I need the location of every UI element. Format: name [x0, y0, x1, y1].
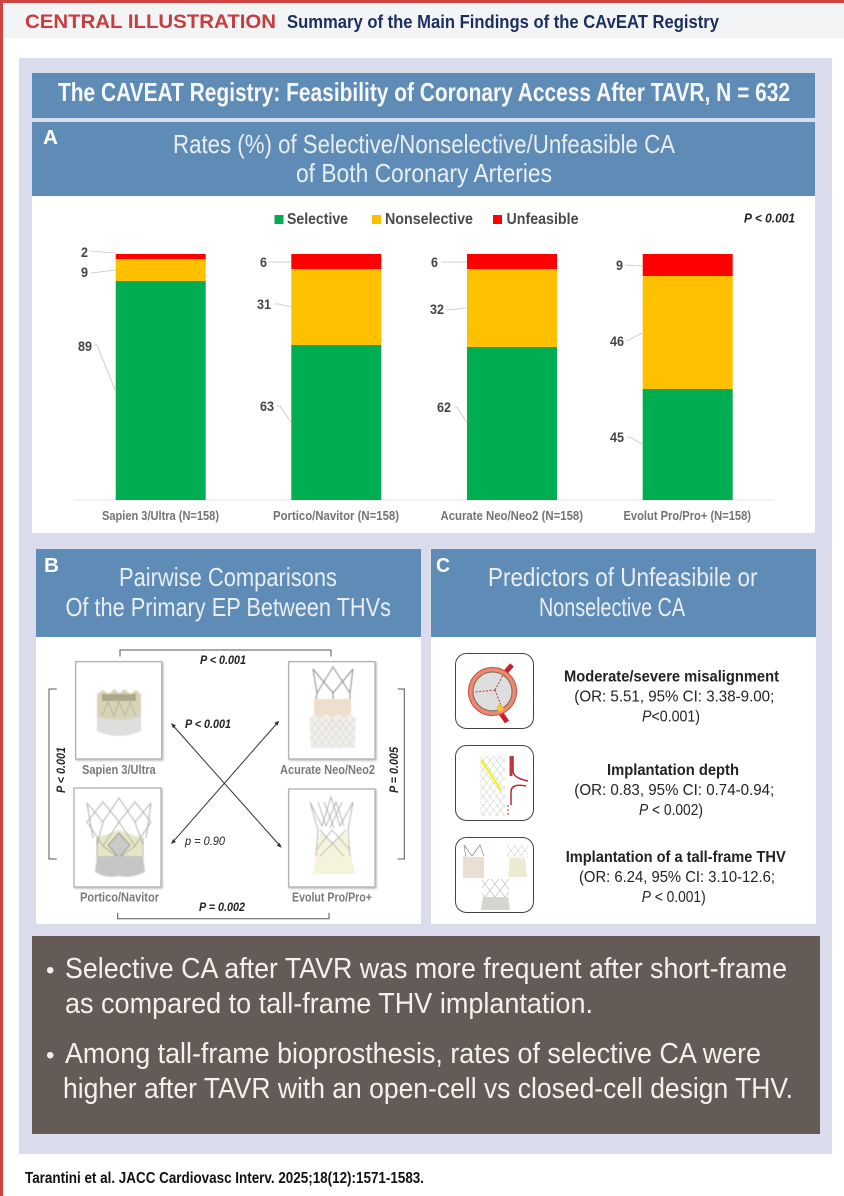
bar: Acurate Neo/Neo2: 32 [430, 301, 444, 317]
panel A header: Rates (%) of Selective/Nonselective/Unfeasible CA [173, 129, 676, 159]
bar: Sapien 3/Ultra: 2 [81, 244, 88, 260]
conclusions box: Selective CA after TAVR was more frequent after short-frame [65, 953, 787, 985]
bar: Portico/Navitor: 31 [257, 296, 271, 312]
p values: p = 0.90 [184, 834, 225, 848]
citation: Tarantini et al. JACC Cardiovasc Interv. 2025;18(12):1571-1583. [25, 1170, 424, 1187]
panel B: pairwise comparisons [36, 549, 421, 924]
p values: P = 0.002 [199, 900, 245, 914]
text: moderate/severe misalignment [564, 669, 779, 726]
device: Portico/Navitor: Portico/Navitor [80, 891, 159, 905]
panel A header: of Both Coronary Arteries [296, 158, 552, 188]
device: Acurate Neo/Neo2: Acurate Neo/Neo2 [280, 763, 375, 777]
panel A: stacked bar chart [32, 122, 815, 533]
bar: Acurate Neo/Neo2: Acurate Neo/Neo2 (N=158) [440, 509, 583, 523]
device: Sapien 3/Ultra: Sapien 3/Ultra [82, 763, 157, 777]
legend [274, 211, 579, 228]
bar: Evolut Pro/Pro+: 45 [610, 429, 624, 445]
conclusions box: higher after TAVR with an open-cell vs closed-cell design THV. [63, 1073, 793, 1105]
p values [54, 653, 401, 914]
device: Portico/Navitor [74, 788, 161, 905]
legend: Unfeasible [506, 211, 579, 228]
panel B header: Pairwise Comparisons [119, 562, 337, 592]
text: tall-frame THV: (OR: 6.24, 95% CI: 3.10-12.6; [579, 869, 775, 886]
bar: Sapien 3/Ultra: 89 [78, 338, 92, 354]
panel B header: B [44, 555, 59, 577]
bar: Acurate Neo/Neo2 [430, 254, 583, 523]
bar: Portico/Navitor: 6 [260, 254, 267, 270]
text: moderate/severe misalignment: Moderate/severe misalignment [564, 669, 779, 686]
panel C header: Nonselective CA [539, 592, 685, 622]
panel A header [32, 122, 815, 196]
header band: CENTRAL ILLUSTRATION [25, 12, 276, 33]
conclusions box [32, 936, 820, 1134]
header band: Summary of the Main Findings of the CAvEAT Registry [287, 12, 719, 32]
bar: Sapien 3/Ultra [78, 244, 219, 523]
device: Evolut Pro/Pro+ [289, 789, 375, 905]
text: tall-frame THV: Implantation of a tall-frame THV [566, 849, 786, 866]
comparison brackets [49, 650, 404, 919]
bar: Portico/Navitor [257, 254, 399, 523]
icon: tall-frame THVs [456, 838, 534, 912]
p values: P = 0.005 [387, 747, 401, 793]
bar: Evolut Pro/Pro+: Evolut Pro/Pro+ (N=158) [624, 509, 751, 523]
legend: Nonselective [385, 211, 473, 228]
bar: Portico/Navitor: 63 [260, 398, 274, 414]
bar: Portico/Navitor: Portico/Navitor (N=158) [273, 509, 399, 523]
device: Evolut Pro/Pro+: Evolut Pro/Pro+ [292, 891, 372, 905]
p values: P < 0.001 [54, 747, 68, 793]
text: implantation depth [574, 762, 774, 819]
text: tall-frame THV [566, 849, 786, 906]
text: implantation depth: P < 0.002) [639, 802, 703, 819]
bar: Acurate Neo/Neo2: 62 [437, 399, 451, 415]
p value A: P < 0.001 [744, 212, 795, 226]
legend: Selective [287, 211, 348, 228]
panel C header: C [436, 555, 450, 577]
device: Acurate Neo/Neo2 [280, 662, 375, 777]
conclusions box: • [46, 957, 54, 984]
bar: Acurate Neo/Neo2: 6 [431, 254, 438, 270]
panel B header [36, 549, 421, 637]
conclusions box: as compared to tall-frame THV implantation. [65, 988, 593, 1020]
panel B header: Of the Primary EP Between THVs [66, 592, 391, 622]
text: moderate/severe misalignment: (OR: 5.51, 95% CI: 3.38-9.00; [574, 689, 774, 706]
panel C body [431, 637, 816, 924]
bar: Sapien 3/Ultra: 9 [81, 264, 88, 280]
panel A header: A [43, 127, 58, 149]
panel B body [36, 637, 421, 924]
panel C header: Predictors of Unfeasibile or [488, 562, 758, 592]
bar: Sapien 3/Ultra: Sapien 3/Ultra (N=158) [102, 509, 219, 523]
bar: Evolut Pro/Pro+ [610, 254, 751, 523]
conclusions box: Among tall-frame bioprosthesis, rates of selective CA were [65, 1038, 761, 1070]
bar: Evolut Pro/Pro+: 9 [616, 257, 623, 273]
text: implantation depth: Implantation depth [607, 762, 739, 779]
device: Sapien 3/Ultra [76, 662, 162, 777]
axis line [73, 499, 775, 501]
text: tall-frame THV: P < 0.001) [642, 889, 706, 906]
panel C: predictors [431, 549, 816, 924]
chart area background [32, 196, 815, 533]
p values: P < 0.001 [200, 653, 246, 667]
text: moderate/severe misalignment: P<0.001) [642, 709, 700, 726]
icon: misalignment [456, 654, 534, 728]
conclusions box: • [46, 1042, 54, 1069]
header band [3, 3, 844, 38]
bar: Evolut Pro/Pro+: 46 [610, 333, 624, 349]
crossing arrows [171, 721, 282, 848]
main title bar [32, 73, 815, 118]
icon: implantation depth [456, 746, 534, 820]
p values: P < 0.001 [185, 717, 231, 731]
panel C header [431, 549, 816, 637]
text: implantation depth: (OR: 0.83, 95% CI: 0.74-0.94; [574, 782, 774, 799]
